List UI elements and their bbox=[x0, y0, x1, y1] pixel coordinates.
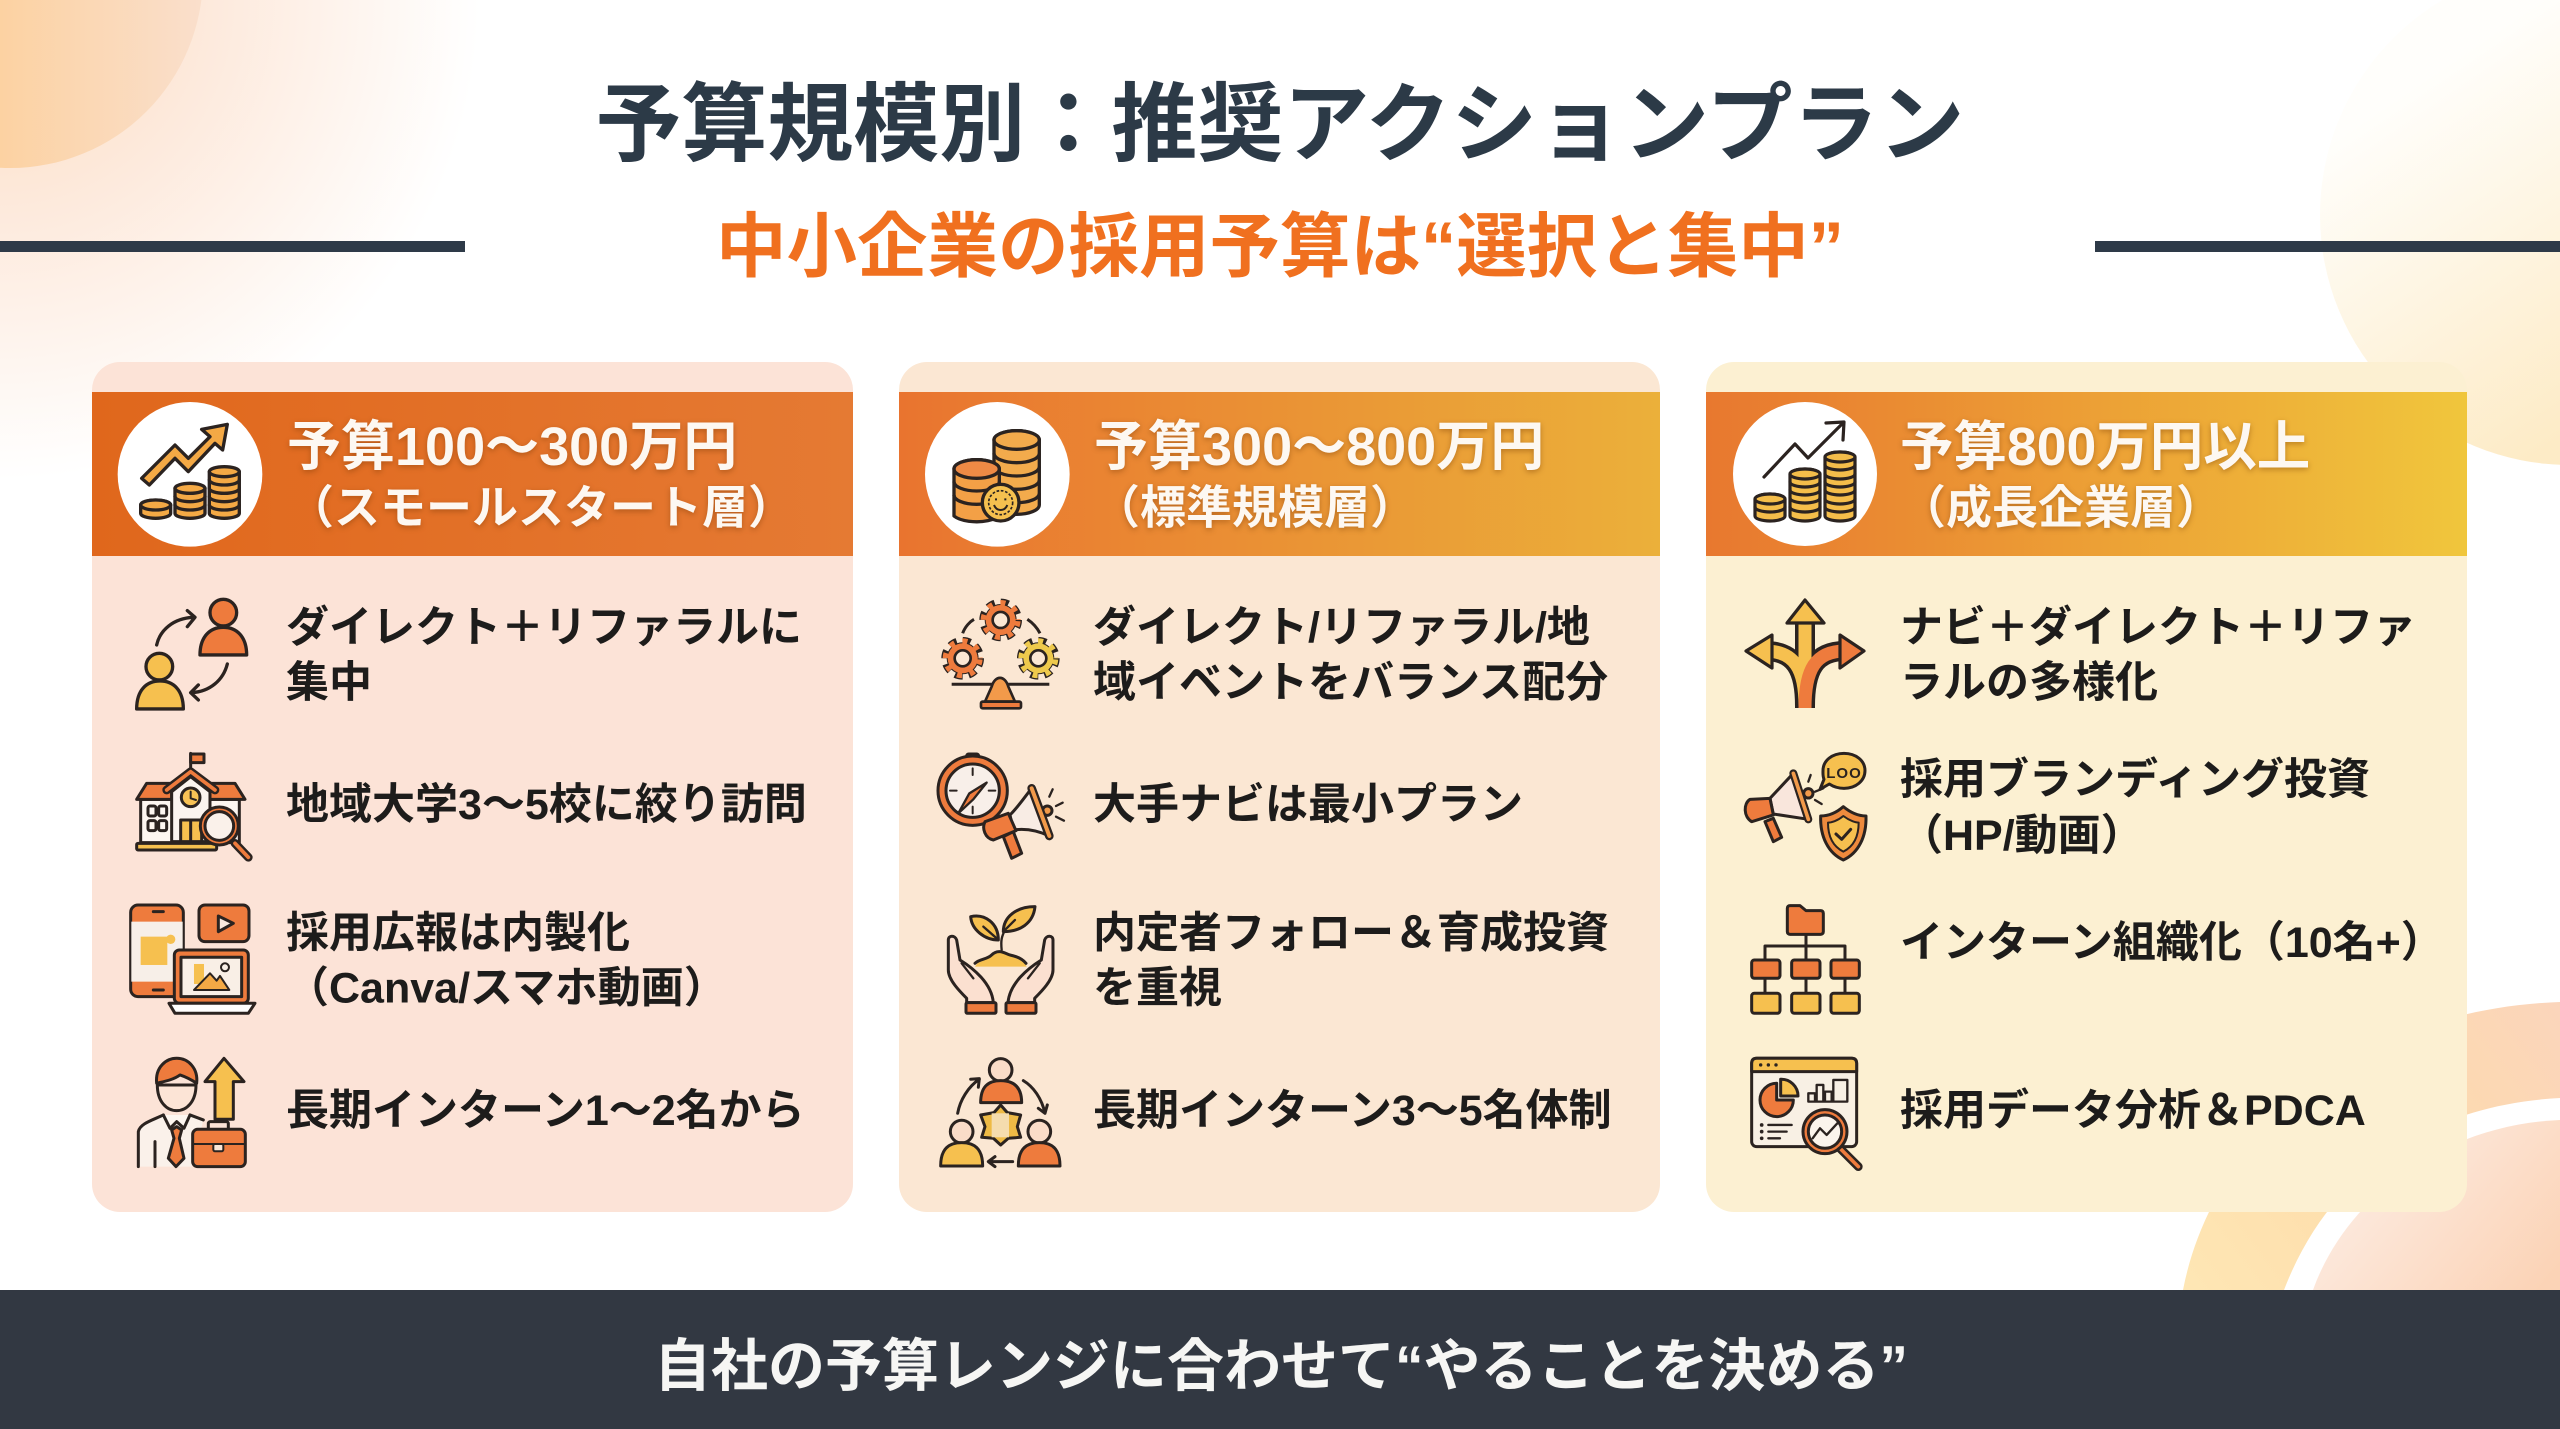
header heading: standard bbox=[1094, 417, 1544, 534]
footer banner bbox=[0, 1290, 2560, 1429]
subtitle with side rules bbox=[0, 207, 2560, 286]
icon: phone, video and laptop bbox=[131, 905, 255, 1013]
item text: follow-up and training: を重視 bbox=[1093, 964, 1222, 1012]
panel: growth budget bbox=[1706, 362, 2467, 1212]
icon: school with magnifier bbox=[137, 753, 248, 857]
header heading: growth: 予算800万円以上 bbox=[1900, 418, 2310, 477]
icon: coin stacks with smiling coin bbox=[925, 402, 1070, 547]
item text: in-house recruiting PR: （Canva/スマホ動画） bbox=[286, 964, 727, 1012]
header heading: small start: （スモールスタート層） bbox=[288, 482, 794, 534]
item text: balanced allocation: 域イベントをバランス配分 bbox=[1093, 659, 1608, 707]
header heading: small start bbox=[287, 417, 794, 534]
panel header: growth bbox=[1706, 392, 2467, 556]
item text: intern organisation: インターン組織化（10名+） bbox=[1900, 919, 2444, 967]
icon: hands holding a sprout bbox=[948, 907, 1053, 1013]
icon: rising arrow and coins bbox=[118, 402, 262, 547]
icon: team cycle with badge bbox=[941, 1059, 1060, 1167]
item text: diversified channels: ラルの多様化 bbox=[1900, 659, 2158, 707]
subtitle with side rules: 中小企業の採用予算は“選択と集中” bbox=[716, 207, 1844, 286]
item text: long-term interns: 長期インターン1〜2名から bbox=[286, 1087, 805, 1135]
icon: megaphone, speech bubble and shield bbox=[1745, 753, 1866, 860]
item text: minimum job-board plan: 大手ナビは最小プラン bbox=[1093, 781, 1523, 829]
header heading: growth: （成長企業層） bbox=[1900, 482, 2222, 534]
icon label: bubble text: LOO bbox=[1826, 765, 1862, 782]
item text: interns three to five: 長期インターン3〜5名体制 bbox=[1093, 1087, 1612, 1135]
icon: three gears on a balance bbox=[946, 603, 1055, 708]
item text: follow-up and training: 内定者フォロー＆育成投資 bbox=[1093, 910, 1609, 958]
item text: data analysis: 採用データ分析＆PDCA bbox=[1900, 1086, 2366, 1135]
panel header: standard bbox=[899, 392, 1660, 556]
title: 予算規模別：推奨アクションプラン bbox=[595, 77, 1965, 173]
item text: direct and referral: 集中 bbox=[286, 659, 372, 707]
header heading: small start: 予算100〜300万円 bbox=[287, 417, 737, 477]
panel header: small start bbox=[92, 392, 853, 556]
footer banner: 自社の予算レンジに合わせて“やることを決める” bbox=[654, 1334, 1908, 1398]
panel: small start budget bbox=[92, 362, 853, 1212]
header heading: standard: 予算300〜800万円 bbox=[1094, 417, 1544, 477]
item text: balanced allocation: ダイレクト/リファラル/地 bbox=[1093, 604, 1590, 652]
item text: regional universities: 地域大学3〜5校に絞り訪問 bbox=[286, 781, 807, 829]
item text: branding investment: （HP/動画） bbox=[1900, 812, 2144, 860]
icon: organisation chart bbox=[1752, 906, 1859, 1013]
panel: standard budget bbox=[899, 362, 1660, 1212]
icon: compass and megaphone bbox=[938, 754, 1064, 858]
icon: line chart and yellow coin stacks bbox=[1733, 402, 1877, 546]
header heading: growth bbox=[1900, 418, 2310, 534]
icon: three-way branching arrows bbox=[1746, 600, 1864, 708]
icon: data dashboard with magnifier bbox=[1752, 1058, 1858, 1167]
item text: direct and referral: ダイレクト＋リファラルに bbox=[286, 604, 802, 652]
icon: person with briefcase and arrow bbox=[138, 1058, 245, 1167]
item text: diversified channels: ナビ＋ダイレクト＋リファ bbox=[1900, 604, 2416, 652]
item text: in-house recruiting PR: 採用広報は内製化 bbox=[286, 910, 630, 958]
icon: two people referral bbox=[137, 599, 247, 709]
item text: branding investment: 採用ブランディング投資 bbox=[1900, 756, 2370, 804]
header heading: standard: （標準規模層） bbox=[1094, 482, 1416, 534]
